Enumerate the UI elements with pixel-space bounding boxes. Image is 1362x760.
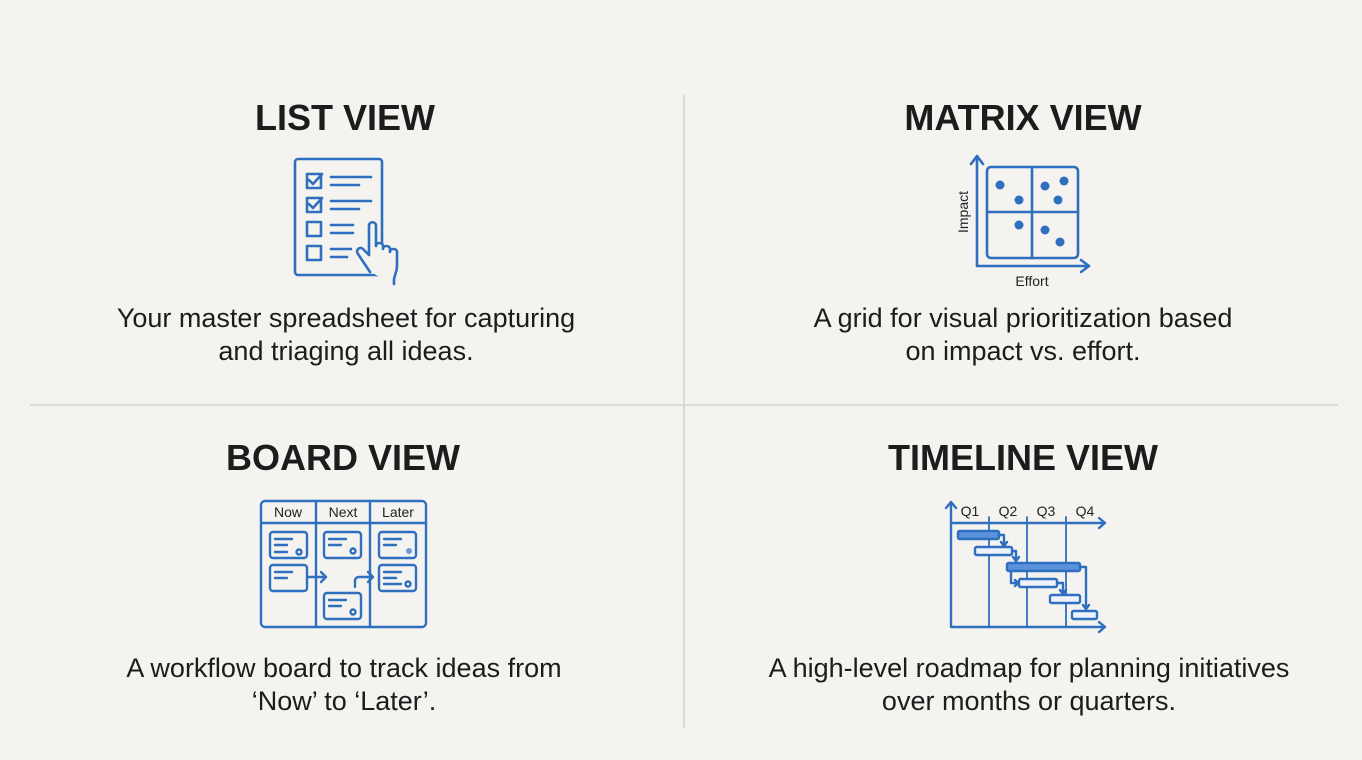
icon: kanban board: Next: [329, 504, 357, 520]
icon: timeline gantt: Q4: [1076, 503, 1095, 519]
text: matrix description: A grid for visual prioritization based: [814, 303, 1232, 333]
icon: matrix: Effort: [1015, 273, 1049, 289]
icon: matrix: Impact: [955, 191, 971, 233]
text: board description: A workflow board to track ideas from: [126, 653, 562, 683]
title: board view: BOARD VIEW: [226, 437, 460, 478]
title: timeline view: TIMELINE VIEW: [888, 437, 1158, 478]
text: timeline description: over months or quarters.: [882, 686, 1176, 716]
icon: kanban board: Now: [274, 504, 303, 520]
text: matrix description: on impact vs. effort.: [905, 336, 1141, 366]
icon: timeline gantt: Q3: [1037, 503, 1056, 519]
icon: timeline gantt: Q1: [961, 503, 980, 519]
text: timeline description: [768, 653, 1289, 716]
text: matrix description: [814, 303, 1232, 366]
title: list view: LIST VIEW: [255, 97, 435, 138]
text: timeline description: A high-level roadmap for planning initiatives: [769, 653, 1289, 683]
text: list description: Your master spreadsheet for capturing: [117, 303, 575, 333]
text: board description: ‘Now’ to ‘Later’.: [252, 686, 436, 716]
icon: timeline gantt: Q2: [999, 503, 1018, 519]
text: list description: and triaging all ideas.: [218, 336, 474, 366]
text: board description: [126, 653, 562, 716]
icon: kanban board: Later: [382, 504, 414, 520]
text: list description: [117, 303, 575, 366]
title: matrix view: MATRIX VIEW: [904, 97, 1142, 138]
